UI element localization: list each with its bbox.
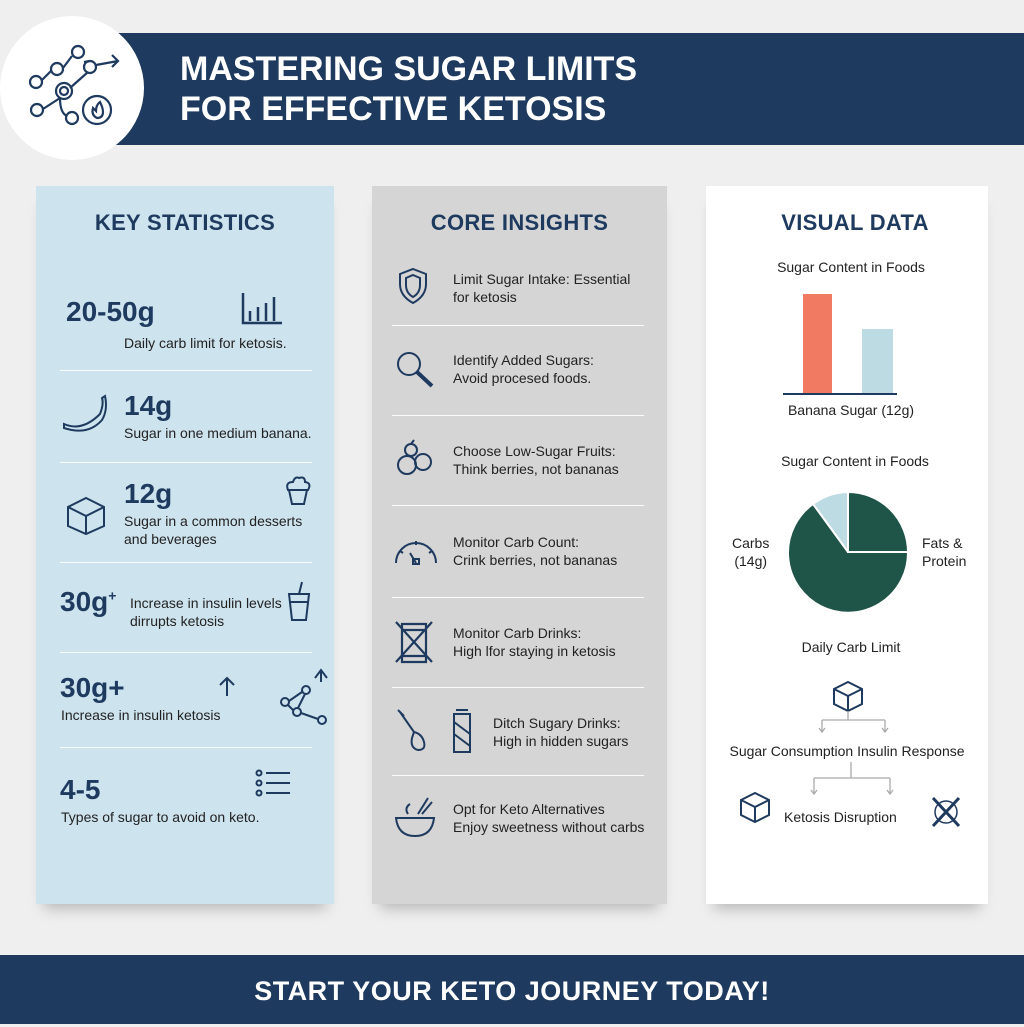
insight: low sugar fruits: Think berries, not bananas (453, 461, 619, 477)
header band (115, 33, 1024, 145)
stat 30g+ (60, 668, 328, 725)
insight: carb count: Monitor Carb Count: (453, 534, 579, 550)
flow diagram: daily carb limit (729, 639, 965, 827)
header icon circle (0, 16, 144, 160)
stat 20-50g (66, 293, 287, 351)
flow diagram: daily carb limit: Daily Carb Limit (802, 639, 900, 655)
insight: limit sugar: for ketosis (453, 289, 517, 305)
stat 30g insulin: dirrupts ketosis (130, 613, 224, 629)
insight: carb drinks: High lfor staying in ketosis (453, 643, 616, 659)
insight: low sugar fruits: Choose Low-Sugar Fruits: (453, 443, 616, 459)
flow diagram: daily carb limit: Sugar Consumption Insulin Response (729, 743, 965, 759)
pie chart: Sugar Content in Foods (781, 453, 929, 469)
panel: visual data (706, 186, 988, 904)
stat 4-5: 4-5 (60, 774, 100, 805)
stat 14g: Sugar in one medium banana. (124, 425, 312, 441)
stat 30g insulin: Increase in insulin levels (130, 595, 282, 611)
title (180, 50, 637, 128)
stat 14g: 14g (124, 390, 172, 421)
stat 12g (67, 476, 310, 547)
insight: carb drinks: Monitor Carb Drinks: (453, 625, 581, 641)
insight: limit sugar: Limit Sugar Intake: Essential (453, 271, 630, 287)
insight: sugary drinks: Ditch Sugary Drinks: (493, 715, 621, 731)
stat 20-50g: 20-50g (66, 296, 155, 327)
title: MASTERING SUGAR LIMITS (180, 50, 637, 88)
bar chart: Sugar Content in Foods (777, 259, 925, 275)
insight: keto alternatives: Opt for Keto Alternatives (453, 801, 605, 817)
stat 12g: Sugar in a common desserts (124, 513, 302, 529)
insight: limit sugar (399, 268, 630, 305)
pie chart: Carbs (732, 535, 769, 551)
stat 4-5: Types of sugar to avoid on keto. (61, 809, 259, 825)
icon: list (256, 770, 290, 796)
insight: carb count (395, 534, 617, 568)
flow diagram: daily carb limit: Ketosis Disruption (784, 809, 897, 825)
insight: carb count: Crink berries, not bananas (453, 552, 617, 568)
insight: added sugars: Avoid procesed foods. (453, 370, 591, 386)
stat 4-5 (60, 770, 290, 825)
stat 30g+: 30g+ (60, 672, 125, 703)
icon: cup (288, 582, 310, 621)
title: FOR EFFECTIVE KETOSIS (180, 90, 606, 128)
stat 30g insulin (60, 582, 310, 629)
icon: cupcake (286, 476, 310, 505)
footer banner (0, 955, 1024, 1024)
footer banner: START YOUR KETO JOURNEY TODAY! (254, 976, 770, 1006)
icon: arrow up and network (219, 668, 328, 725)
heading: key statistics: KEY STATISTICS (95, 210, 275, 235)
insight: sugary drinks (397, 709, 628, 753)
insight: added sugars (397, 352, 594, 388)
stat 30g insulin: 30g+ (60, 586, 116, 617)
panel: core insights (372, 186, 667, 904)
insight: sugary drinks: High in hidden sugars (493, 733, 628, 749)
pie chart: (14g) (734, 553, 767, 569)
bar chart: Banana Sugar (12g) (788, 402, 914, 418)
insight: carb drinks (395, 621, 616, 664)
insight: low sugar fruits (397, 439, 619, 477)
insight: keto alternatives: Enjoy sweetness without carbs (453, 819, 644, 835)
heading: core insights: CORE INSIGHTS (431, 210, 608, 235)
bar chart (777, 259, 925, 418)
stat 14g (63, 390, 312, 441)
icon: bar chart (242, 293, 282, 324)
pie chart: Protein (922, 553, 966, 569)
stat 12g: and beverages (124, 531, 217, 547)
stat 20-50g: Daily carb limit for ketosis. (124, 335, 287, 351)
pie chart (732, 453, 966, 612)
stat 30g+: Increase in insulin ketosis (61, 707, 221, 723)
pie chart: Fats & (922, 535, 962, 551)
heading: visual data: VISUAL DATA (781, 210, 929, 235)
panel: key statistics (36, 186, 334, 904)
insight: keto alternatives (394, 798, 644, 837)
stat 12g: 12g (124, 478, 172, 509)
insight: added sugars: Identify Added Sugars: (453, 352, 594, 368)
